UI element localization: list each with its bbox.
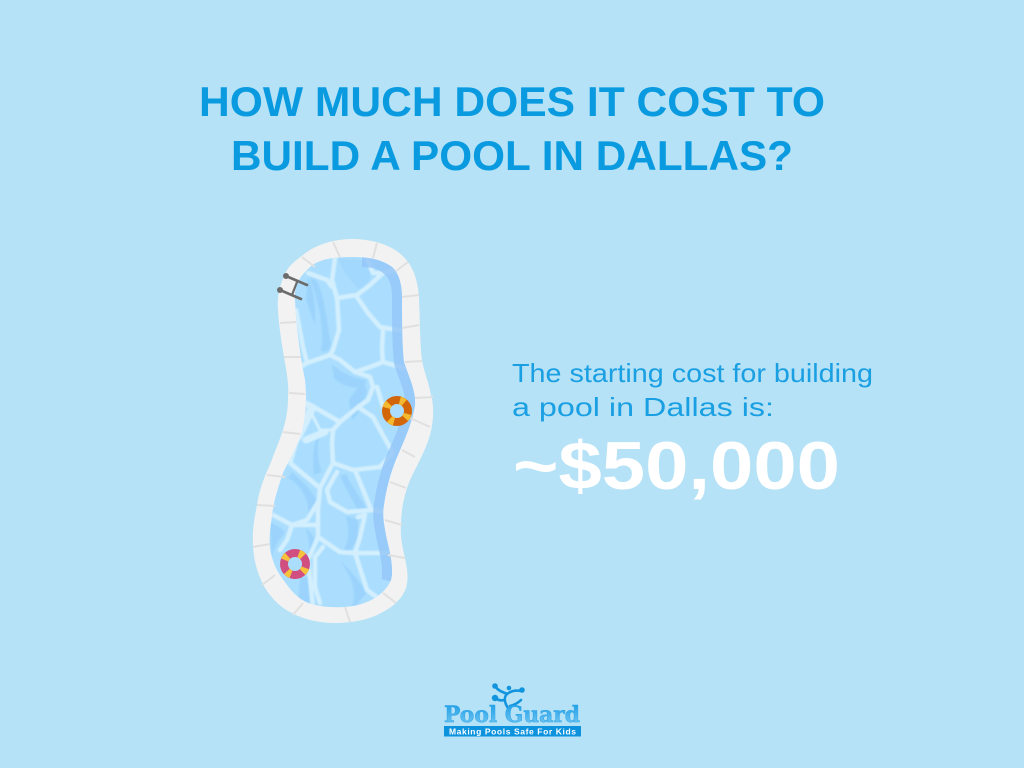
pool illustration <box>253 239 433 623</box>
logo <box>444 683 581 736</box>
pool deck <box>253 239 433 623</box>
icon: orange life ring <box>384 398 410 424</box>
icon: pool ladder <box>277 273 307 299</box>
title: BUILD A POOL IN DALLAS? <box>231 132 793 179</box>
icon: water splash <box>492 683 525 708</box>
darker water patches <box>270 258 370 606</box>
title <box>199 78 825 179</box>
water caustic lines <box>273 258 404 607</box>
logo wordmark: Pool Guard <box>444 702 580 728</box>
water surface <box>270 257 416 608</box>
intro text: a pool in Dallas is: <box>512 392 774 422</box>
intro text: The starting cost for building <box>512 358 873 388</box>
right shadow band <box>362 255 417 582</box>
cost figure: ~$50,000 <box>513 428 840 504</box>
title: HOW MUCH DOES IT COST TO <box>199 78 825 125</box>
intro text <box>512 358 873 422</box>
deck tile joints <box>253 242 433 622</box>
logo tagline: Making Pools Safe For Kids <box>449 726 576 736</box>
icon: pink life ring <box>281 550 309 578</box>
